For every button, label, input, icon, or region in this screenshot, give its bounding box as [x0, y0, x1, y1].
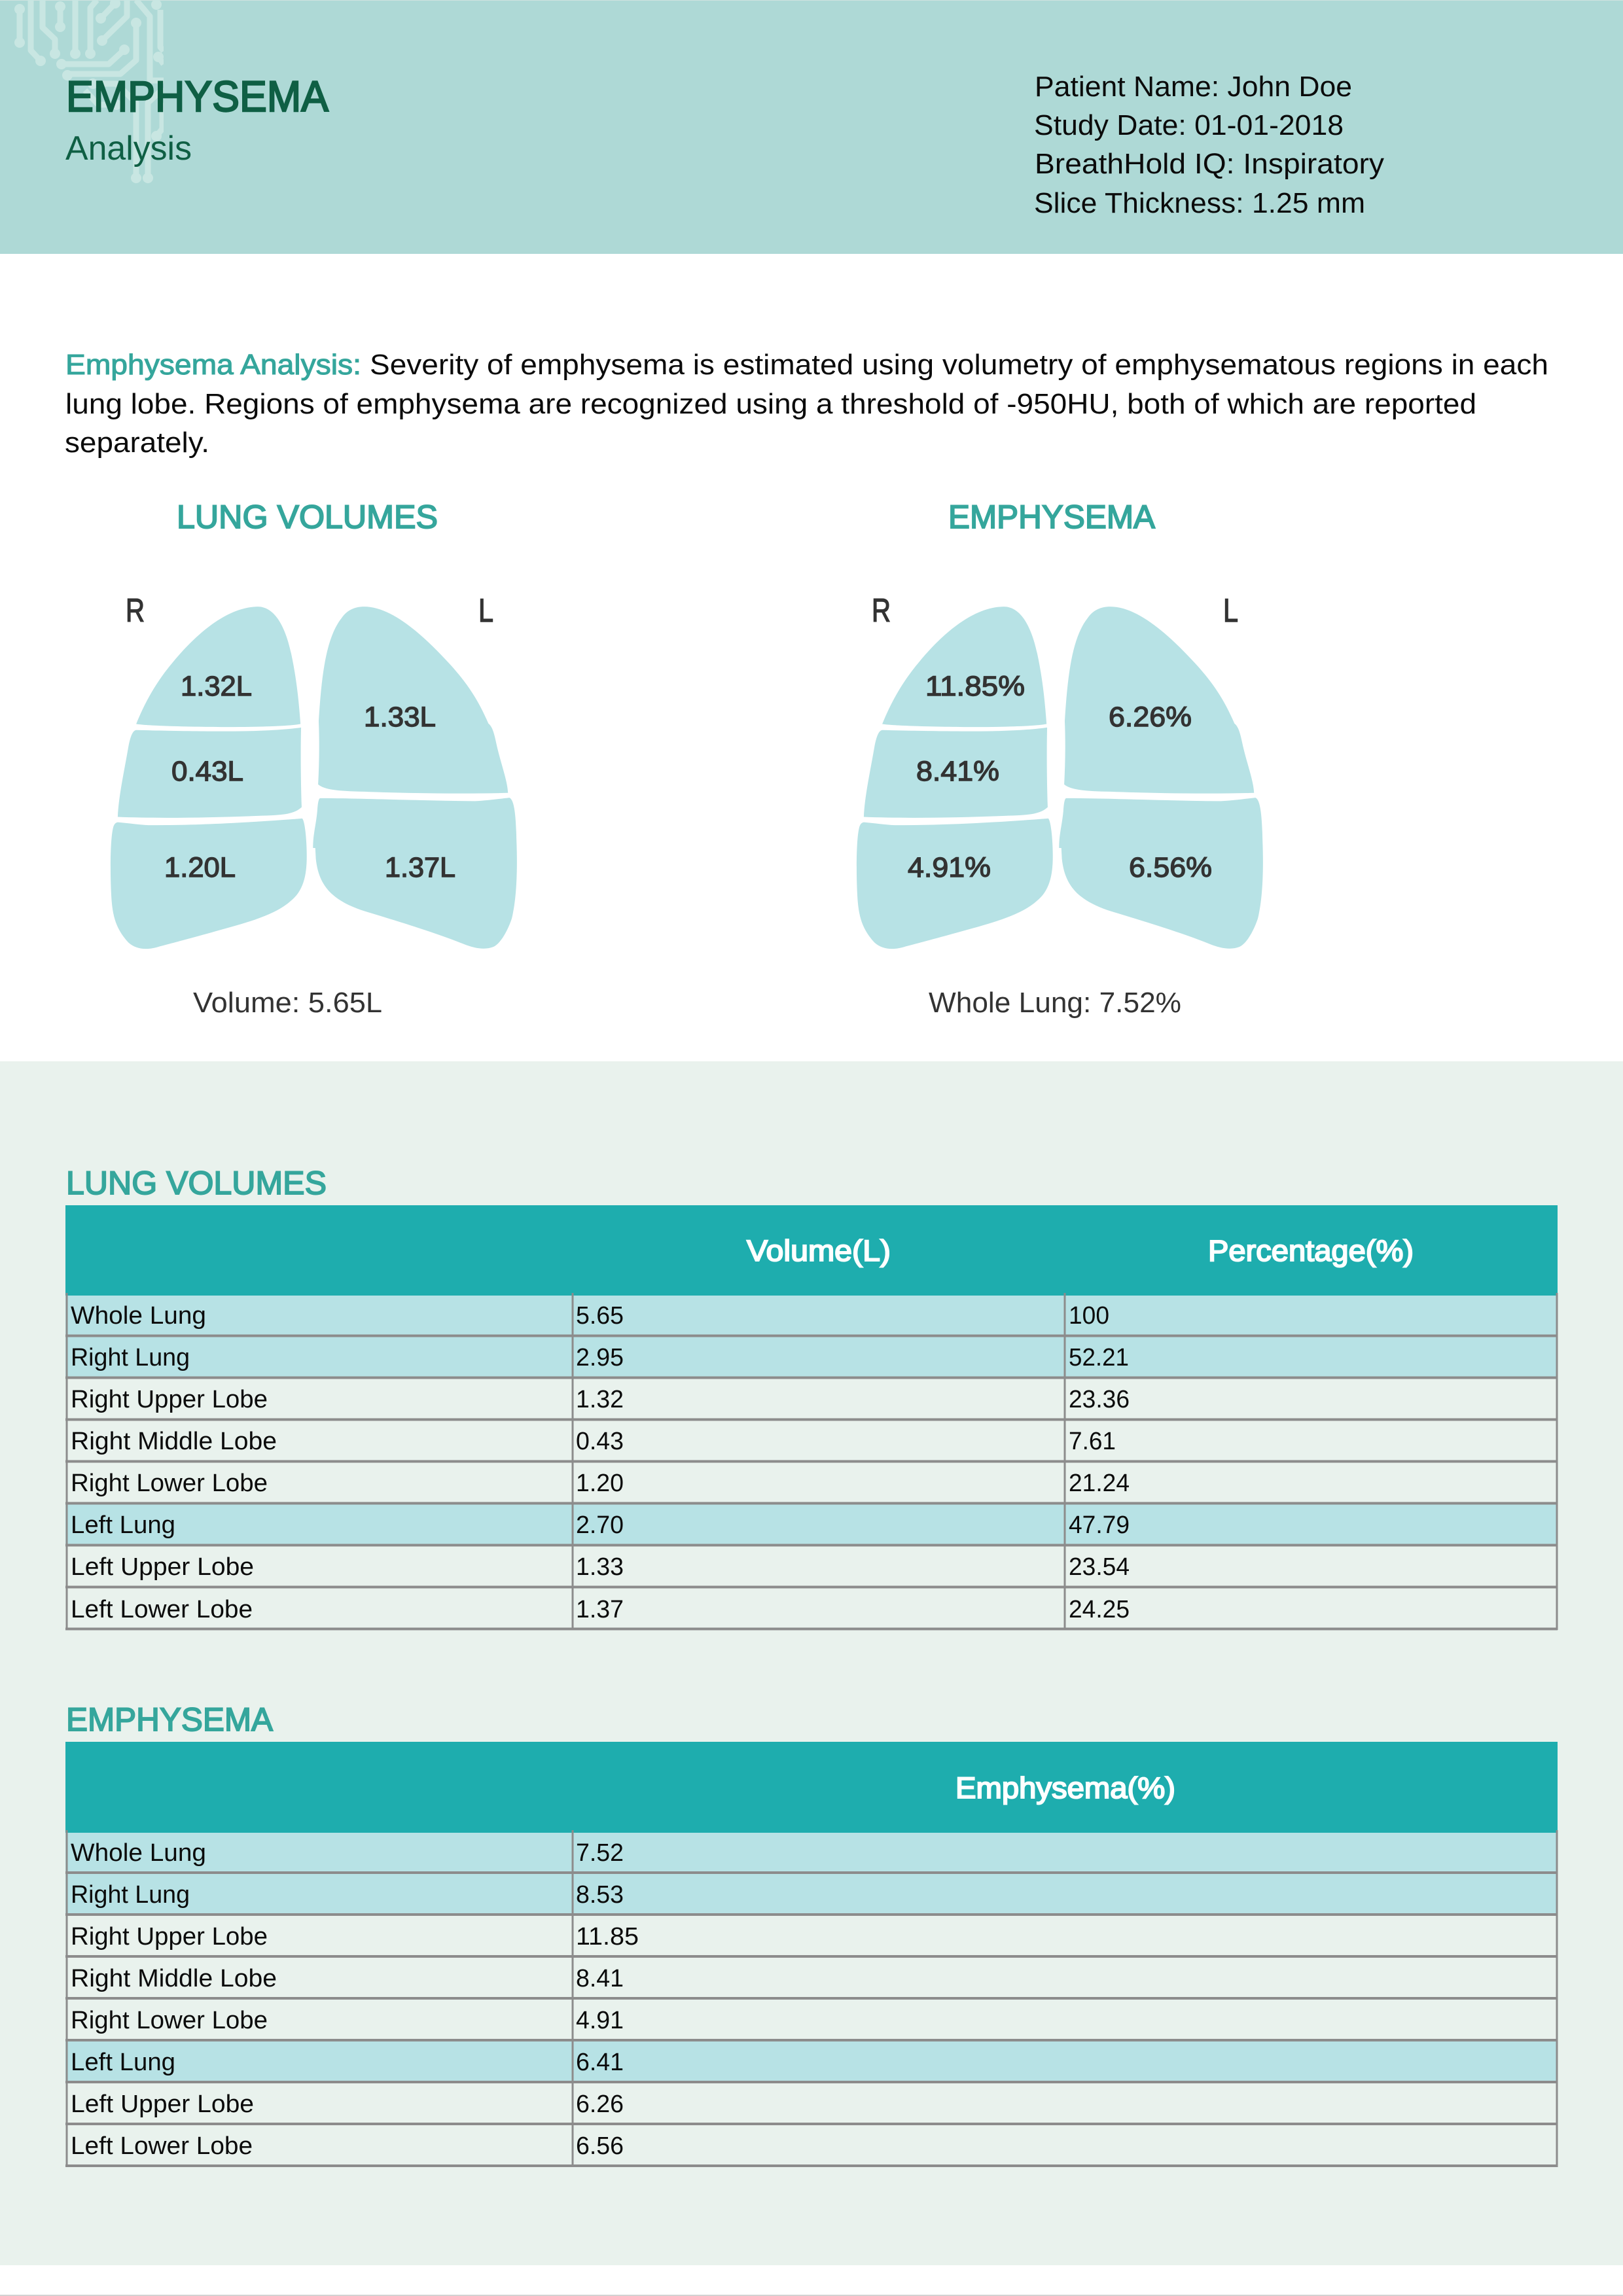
table: lung volumes: 5.65	[576, 1302, 624, 1330]
patient details: BreathHold IQ: Inspiratory	[1035, 148, 1384, 180]
table: emphysema: Left Lower Lobe	[71, 2132, 253, 2160]
intro paragraph: Emphysema Analysis:	[65, 349, 361, 381]
patient details: Patient Name: John Doe	[1035, 71, 1352, 103]
table: lung volumes: Right Middle Lobe	[71, 1428, 277, 1455]
title: EMPHYSEMA	[66, 72, 329, 120]
table: emphysema: 6.26	[576, 2091, 624, 2118]
table: lung volumes: Percentage(%)	[1208, 1234, 1414, 1267]
lung diagram: volumes: 1.33L	[364, 701, 436, 733]
lung diagram: emphysema	[857, 592, 1263, 949]
table: lung volumes: Right Lung	[71, 1344, 190, 1371]
table: lung volumes: Volume(L)	[747, 1234, 891, 1267]
table: lung volumes: 24.25	[1069, 1596, 1130, 1623]
patient details: Slice Thickness: 1.25 mm	[1034, 187, 1365, 219]
table: emphysema: Right Lower Lobe	[71, 2007, 268, 2034]
table: lung volumes: 1.20	[576, 1470, 624, 1497]
lung diagram: emphysema: R	[872, 592, 891, 629]
lung diagram: volumes: L	[478, 592, 493, 629]
table: lung volumes: 1.37	[576, 1596, 624, 1623]
caption: whole lung emphysema: Whole Lung: 7.52%	[929, 987, 1181, 1019]
heading: lung volumes table: LUNG VOLUMES	[66, 1165, 327, 1201]
heading: emphysema diagram: EMPHYSEMA	[948, 499, 1156, 535]
table: lung volumes: 47.79	[1069, 1511, 1130, 1539]
table: emphysema: 4.91	[576, 2007, 624, 2034]
patient details	[1034, 71, 1384, 219]
table: emphysema: Right Lung	[71, 1881, 190, 1909]
caption: total volume: Volume: 5.65L	[193, 987, 382, 1019]
table: lung volumes: 0.43	[576, 1428, 624, 1455]
header banner	[0, 0, 1623, 254]
table: lung volumes: 1.33	[576, 1553, 624, 1581]
lung diagram: emphysema: 6.26%	[1109, 701, 1192, 733]
intro paragraph: separately.	[65, 427, 209, 459]
lung diagram: volumes: 1.20L	[164, 852, 236, 883]
table: emphysema: 11.85	[576, 1923, 639, 1951]
lung diagram: volumes: 1.37L	[385, 852, 455, 883]
table: lung volumes: 52.21	[1069, 1344, 1129, 1371]
table: emphysema: Left Upper Lobe	[71, 2091, 254, 2118]
lung diagram: volumes	[111, 592, 517, 949]
lung diagram: emphysema: 11.85%	[925, 671, 1025, 702]
patient details: Study Date: 01-01-2018	[1034, 109, 1344, 141]
table: lung volumes: Left Upper Lobe	[71, 1553, 254, 1581]
table: lung volumes: Whole Lung	[71, 1302, 206, 1330]
lung diagram: volumes: 0.43L	[171, 756, 243, 787]
decorative circuit graphic	[14, 0, 164, 183]
table: emphysema: Right Middle Lobe	[71, 1965, 277, 1992]
table: lung volumes: Right Lower Lobe	[71, 1470, 268, 1497]
table: emphysema: 6.41	[576, 2049, 624, 2076]
lung diagram: emphysema: L	[1223, 592, 1238, 629]
table: lung volumes: 21.24	[1069, 1470, 1130, 1497]
table: lung volumes: 1.32	[576, 1386, 624, 1413]
table: emphysema: 7.52	[576, 1839, 624, 1867]
table: lung volumes: 2.70	[576, 1511, 624, 1539]
intro paragraph: lung lobe. Regions of emphysema are recognized using a threshold of -950HU, both of which are reported	[65, 388, 1476, 420]
table: lung volumes: Right Upper Lobe	[71, 1386, 268, 1413]
intro paragraph	[65, 349, 1548, 459]
table: lung volumes: 7.61	[1069, 1428, 1116, 1455]
subtitle: Analysis	[65, 130, 192, 168]
table: emphysema: 6.56	[576, 2132, 624, 2160]
table: emphysema: 8.53	[576, 1881, 624, 1909]
table: emphysema: 8.41	[576, 1965, 624, 1992]
table: emphysema: Right Upper Lobe	[71, 1923, 268, 1951]
table: emphysema	[65, 1742, 1558, 2167]
lung diagram: emphysema: 8.41%	[916, 756, 999, 787]
lung diagram: emphysema: 6.56%	[1129, 852, 1212, 883]
intro paragraph: Severity of emphysema is estimated using volumetry of emphysematous regions in each	[370, 349, 1548, 381]
table: emphysema: Left Lung	[71, 2049, 175, 2076]
lower band background	[0, 1061, 1623, 2265]
table: lung volumes: 100	[1069, 1302, 1109, 1330]
table: lung volumes: Left Lower Lobe	[71, 1596, 253, 1623]
table: lung volumes: 2.95	[576, 1344, 624, 1371]
table: lung volumes: 23.36	[1069, 1386, 1130, 1413]
table: lung volumes: 23.54	[1069, 1553, 1130, 1581]
table: lung volumes	[65, 1205, 1558, 1630]
table: emphysema: Whole Lung	[71, 1839, 206, 1867]
heading: lung volumes diagram: LUNG VOLUMES	[177, 499, 438, 535]
lung diagram: volumes: 1.32L	[181, 671, 252, 702]
lung diagram: emphysema: 4.91%	[908, 852, 991, 883]
table: lung volumes: Left Lung	[71, 1511, 175, 1539]
lung diagram: volumes: R	[126, 592, 145, 629]
table: emphysema: Emphysema(%)	[955, 1771, 1175, 1805]
heading: emphysema table: EMPHYSEMA	[66, 1701, 274, 1738]
